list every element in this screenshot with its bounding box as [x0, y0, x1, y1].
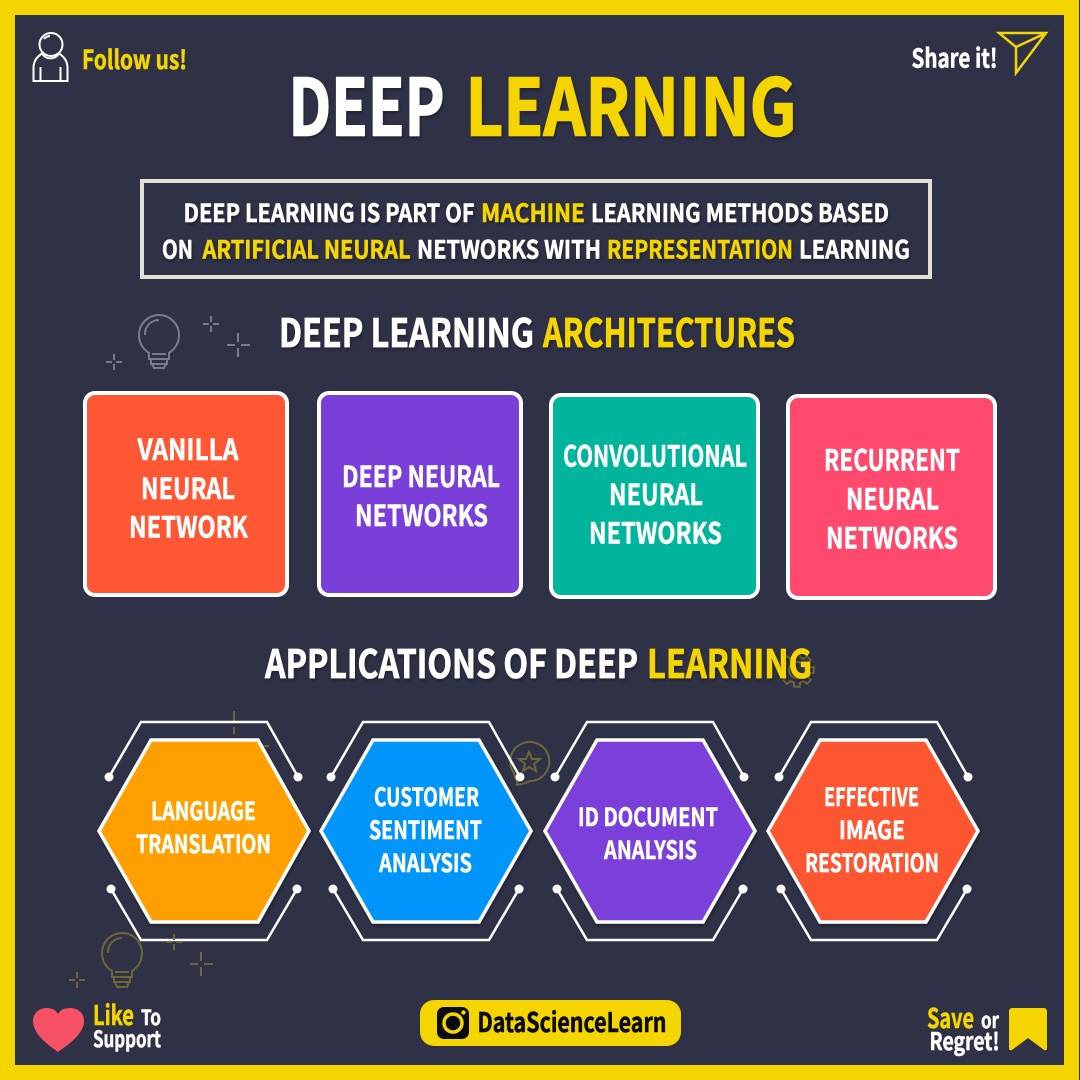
- hexagon: effective image restoration: IMAGE: [839, 811, 905, 847]
- card: convolutional neural networks: NETWORKS: [589, 510, 722, 552]
- hexagon: id document analysis: [545, 722, 755, 940]
- card: vanilla neural network: VANILLA: [137, 427, 239, 469]
- card: recurrent neural networks: [788, 396, 995, 598]
- hexagon: customer sentiment analysis: SENTIMENT: [369, 811, 482, 847]
- icon: bookmark: [1009, 1008, 1047, 1050]
- heading: applications: LEARNING: [647, 634, 812, 690]
- icon: person: [34, 33, 68, 81]
- title: [288, 46, 796, 158]
- hexagon: effective image restoration: RESTORATION: [805, 844, 939, 880]
- hexagon: language translation: TRANSLATION: [136, 825, 271, 861]
- like to support label: To: [141, 1002, 161, 1032]
- card: vanilla neural network: [85, 393, 287, 595]
- save or regret label: or: [981, 1005, 1000, 1035]
- hexagon: customer sentiment analysis: [321, 722, 531, 940]
- title: DEEP: [288, 46, 444, 158]
- definition box: ARTIFICIAL NEURAL: [202, 230, 410, 266]
- icon: decorative gear: [780, 653, 814, 687]
- icon: heart: [33, 1008, 84, 1052]
- definition box: MACHINE: [481, 194, 585, 230]
- instagram handle pill: [420, 1000, 681, 1046]
- hexagon: language translation: LANGUAGE: [151, 792, 256, 828]
- save or regret label: Save: [927, 997, 974, 1036]
- heading: architectures: ARCHITECTURES: [542, 303, 795, 359]
- icon: decorative star speech bubble: [510, 742, 549, 785]
- hexagon: effective image restoration: [768, 722, 978, 940]
- like to support label: [93, 994, 161, 1054]
- card: recurrent neural networks: RECURRENT: [824, 438, 960, 480]
- icon: decorative light bulb bottom: [69, 933, 213, 988]
- card: convolutional neural networks: NEURAL: [609, 472, 703, 514]
- save or regret label: Regret!: [930, 1022, 1000, 1057]
- hexagon: id document analysis: ID DOCUMENT: [578, 798, 718, 834]
- title: LEARNING: [466, 46, 796, 158]
- icon: instagram: [437, 1007, 469, 1039]
- card: deep neural networks: [319, 393, 521, 595]
- card: deep neural networks: DEEP NEURAL: [342, 454, 500, 496]
- definition box: LEARNING METHODS BASED: [591, 194, 889, 230]
- card: vanilla neural network: NEURAL: [141, 466, 235, 508]
- icon: decorative light bulb with sparkles: [106, 315, 250, 370]
- hexagon: id document analysis: ANALYSIS: [603, 831, 697, 867]
- definition box: DEEP LEARNING IS PART OF: [184, 194, 474, 230]
- decorative sparkles behind first hexagon: [234, 711, 269, 746]
- icon: paper plane: [999, 33, 1046, 73]
- share it label: Share it!: [912, 38, 998, 76]
- card: convolutional neural networks: CONVOLUTIONAL: [563, 434, 747, 476]
- card: convolutional neural networks: [551, 395, 758, 597]
- hexagon: customer sentiment analysis: ANALYSIS: [378, 844, 472, 880]
- hexagon: language translation: [99, 722, 309, 940]
- hexagon: customer sentiment analysis: CUSTOMER: [374, 778, 479, 814]
- instagram handle pill: DataScienceLearn: [478, 1001, 666, 1040]
- like to support label: Like: [93, 994, 134, 1033]
- heading: applications: APPLICATIONS OF DEEP: [264, 634, 638, 690]
- definition box: ON: [162, 230, 193, 266]
- card: vanilla neural network: NETWORK: [129, 504, 248, 546]
- heading: architectures: [279, 303, 795, 359]
- follow us label: Follow us!: [82, 40, 187, 77]
- card: deep neural networks: NETWORKS: [355, 493, 488, 535]
- definition box: NETWORKS WITH: [417, 230, 601, 266]
- definition box: REPRESENTATION: [607, 230, 793, 266]
- like to support label: Support: [93, 1022, 161, 1054]
- definition box: [142, 181, 930, 277]
- heading: architectures: DEEP LEARNING: [279, 303, 534, 359]
- card: recurrent neural networks: NEURAL: [846, 476, 939, 518]
- card: recurrent neural networks: NETWORKS: [826, 516, 958, 558]
- hexagon: effective image restoration: EFFECTIVE: [824, 778, 919, 814]
- save or regret label: [927, 997, 1000, 1057]
- definition box: LEARNING: [799, 230, 910, 266]
